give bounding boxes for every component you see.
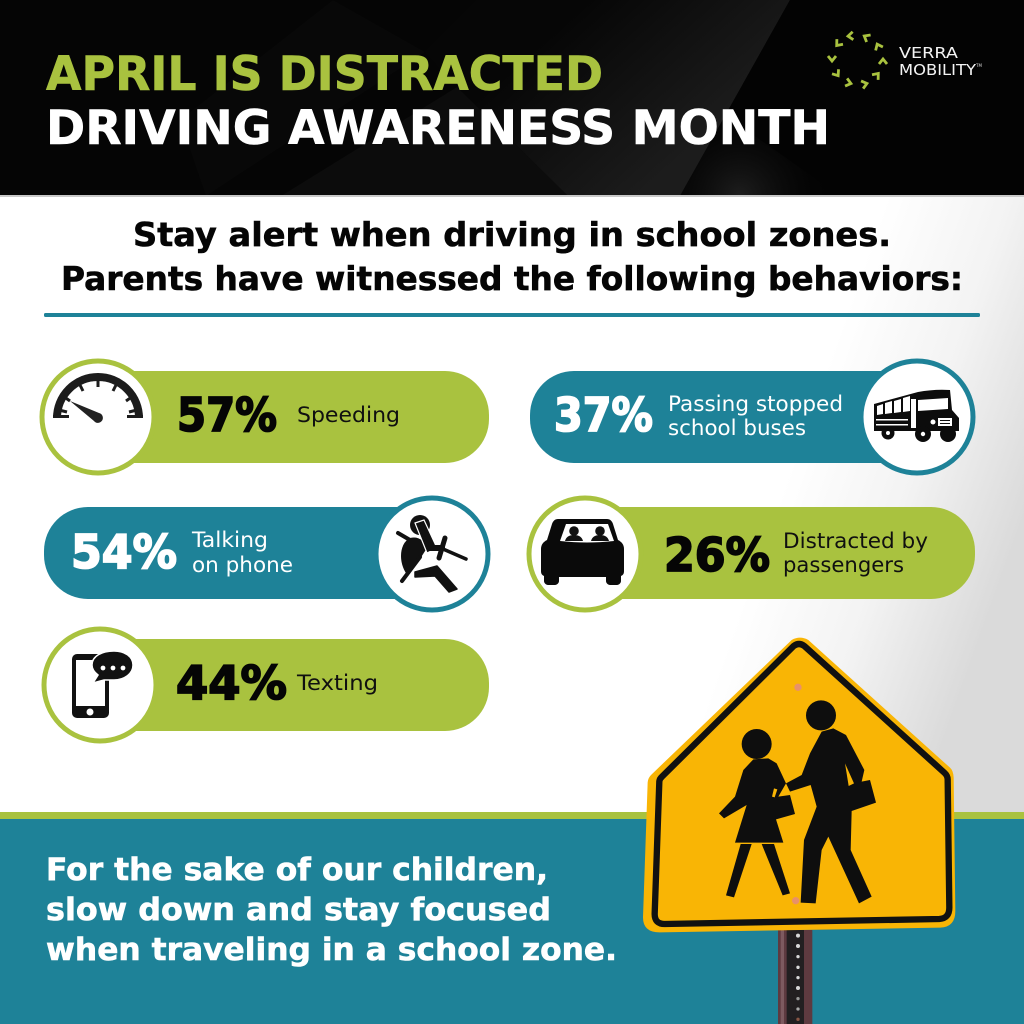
- body background: [0, 196, 1024, 814]
- footer band: [0, 812, 1024, 1024]
- figure: child: [719, 729, 795, 897]
- stat: 26% distracted by passengers: passengers: [783, 553, 904, 577]
- stat: 37% passing stopped school buses: 37%: [554, 388, 653, 442]
- stat: 57% speeding: 57%: [177, 388, 277, 442]
- subheading: Parents have witnessed the following behaviors:: [61, 259, 963, 298]
- logo wordmark: VERRA: [899, 44, 959, 62]
- subheading: Stay alert when driving in school zones.: [133, 215, 891, 254]
- stat: 57% speeding: Speeding: [297, 403, 400, 427]
- stat: 54% talking on phone: Talking: [191, 528, 268, 552]
- header band: [0, 0, 1024, 197]
- title line 2: DRIVING AWARENESS MONTH: [46, 101, 830, 156]
- icon: school bus: [874, 390, 959, 442]
- sign post: [778, 930, 812, 1024]
- stat: 44% texting: [44, 629, 489, 741]
- stat: 54% talking on phone: [44, 498, 488, 610]
- stat: 57% speeding: [42, 361, 489, 473]
- logo: Verra Mobility: [828, 32, 982, 89]
- icon: speedometer: [53, 377, 143, 423]
- stat: 26% distracted by passengers: 26%: [664, 528, 770, 582]
- stat: 26% distracted by passengers: [529, 498, 975, 610]
- stat: 54% talking on phone: 54%: [71, 525, 177, 579]
- stat: 26% distracted by passengers: Distracted by: [783, 529, 928, 553]
- subheading: [61, 215, 963, 298]
- footer message: [46, 852, 617, 968]
- stat: 54% talking on phone: on phone: [192, 553, 293, 577]
- footer message: slow down and stay focused: [46, 892, 551, 928]
- stat: 37% passing stopped school buses: [530, 361, 973, 473]
- rivets: [794, 684, 802, 691]
- footer message: when traveling in a school zone.: [46, 932, 617, 968]
- icon: car with two passengers: [541, 519, 624, 585]
- logo: Verra Mobility: TM: [975, 63, 982, 68]
- icon: driver on phone: [398, 515, 466, 592]
- stat: 37% passing stopped school buses: school buses: [668, 416, 806, 440]
- icon: smartphone with speech bubble: [72, 651, 133, 718]
- title line 1: APRIL IS DISTRACTED: [46, 47, 603, 102]
- stat: 44% texting: 44%: [176, 656, 287, 710]
- stat: 37% passing stopped school buses: Passing stopped: [668, 392, 843, 416]
- logo: Verra Mobility: MOBILITY: [899, 61, 977, 79]
- figure: adult: [786, 700, 876, 903]
- footer message: For the sake of our children,: [46, 852, 548, 888]
- school crossing sign: [643, 638, 955, 1024]
- sign plate: [643, 638, 955, 932]
- stat: 44% texting: Texting: [296, 671, 378, 695]
